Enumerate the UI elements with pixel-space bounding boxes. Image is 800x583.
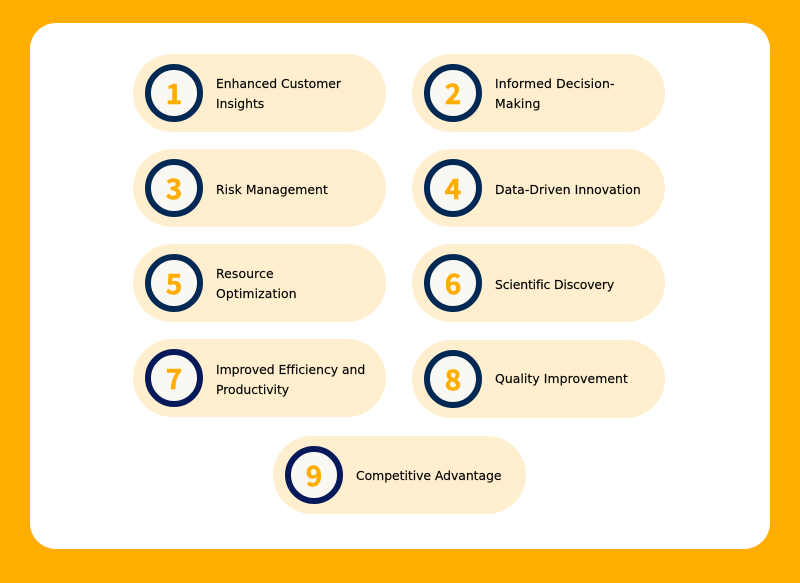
label 9: Competitive Advantage — [356, 468, 502, 483]
item 7: Improved Efficiency and Productivity — [133, 339, 386, 417]
item 2: Informed Decision-Making — [412, 54, 665, 132]
label 1: Insights — [216, 96, 264, 111]
number 1 badge — [145, 64, 203, 122]
label 2: Making — [495, 96, 540, 111]
number 2 badge — [424, 64, 482, 122]
label 3: Risk Management — [216, 182, 328, 197]
number 7 badge: 7 — [166, 358, 182, 398]
label 7: Improved Efficiency and — [216, 362, 365, 377]
number 5 badge — [145, 254, 203, 312]
number 8 badge — [424, 350, 482, 408]
number 4 badge: 4 — [445, 168, 461, 208]
item 8: Quality Improvement — [412, 340, 665, 418]
number 4 badge — [424, 159, 482, 217]
number 3 badge — [145, 159, 203, 217]
label 1 — [216, 76, 342, 111]
label 6: Scientific Discovery — [495, 277, 614, 292]
label 8: Quality Improvement — [495, 371, 628, 386]
label 2: Informed Decision- — [495, 76, 615, 91]
label 1: Enhanced Customer — [216, 76, 341, 91]
number 1 badge: 1 — [166, 73, 182, 113]
number 8 badge: 8 — [445, 359, 461, 399]
label 5: Optimization — [216, 286, 297, 301]
item 3: Risk Management — [133, 149, 386, 227]
item 6: Scientific Discovery — [412, 244, 665, 322]
item 1: Enhanced Customer Insights — [133, 54, 386, 132]
number 3 badge: 3 — [166, 168, 182, 208]
number 7 badge — [145, 349, 203, 407]
label 4: Data-Driven Innovation — [495, 182, 641, 197]
number 6 badge — [424, 254, 482, 312]
number 2 badge: 2 — [445, 73, 461, 113]
label 5 — [216, 266, 297, 301]
item 5: Resource Optimization — [133, 244, 386, 322]
number 9 badge: 9 — [306, 455, 322, 495]
number 9 badge — [285, 446, 343, 504]
label 7 — [216, 362, 365, 397]
number 6 badge: 6 — [445, 263, 461, 303]
label 5: Resource — [216, 266, 274, 281]
item 9: Competitive Advantage — [273, 436, 526, 514]
number 5 badge: 5 — [166, 263, 182, 303]
item 4: Data-Driven Innovation — [412, 149, 665, 227]
label 2 — [495, 76, 615, 111]
label 7: Productivity — [216, 382, 289, 397]
